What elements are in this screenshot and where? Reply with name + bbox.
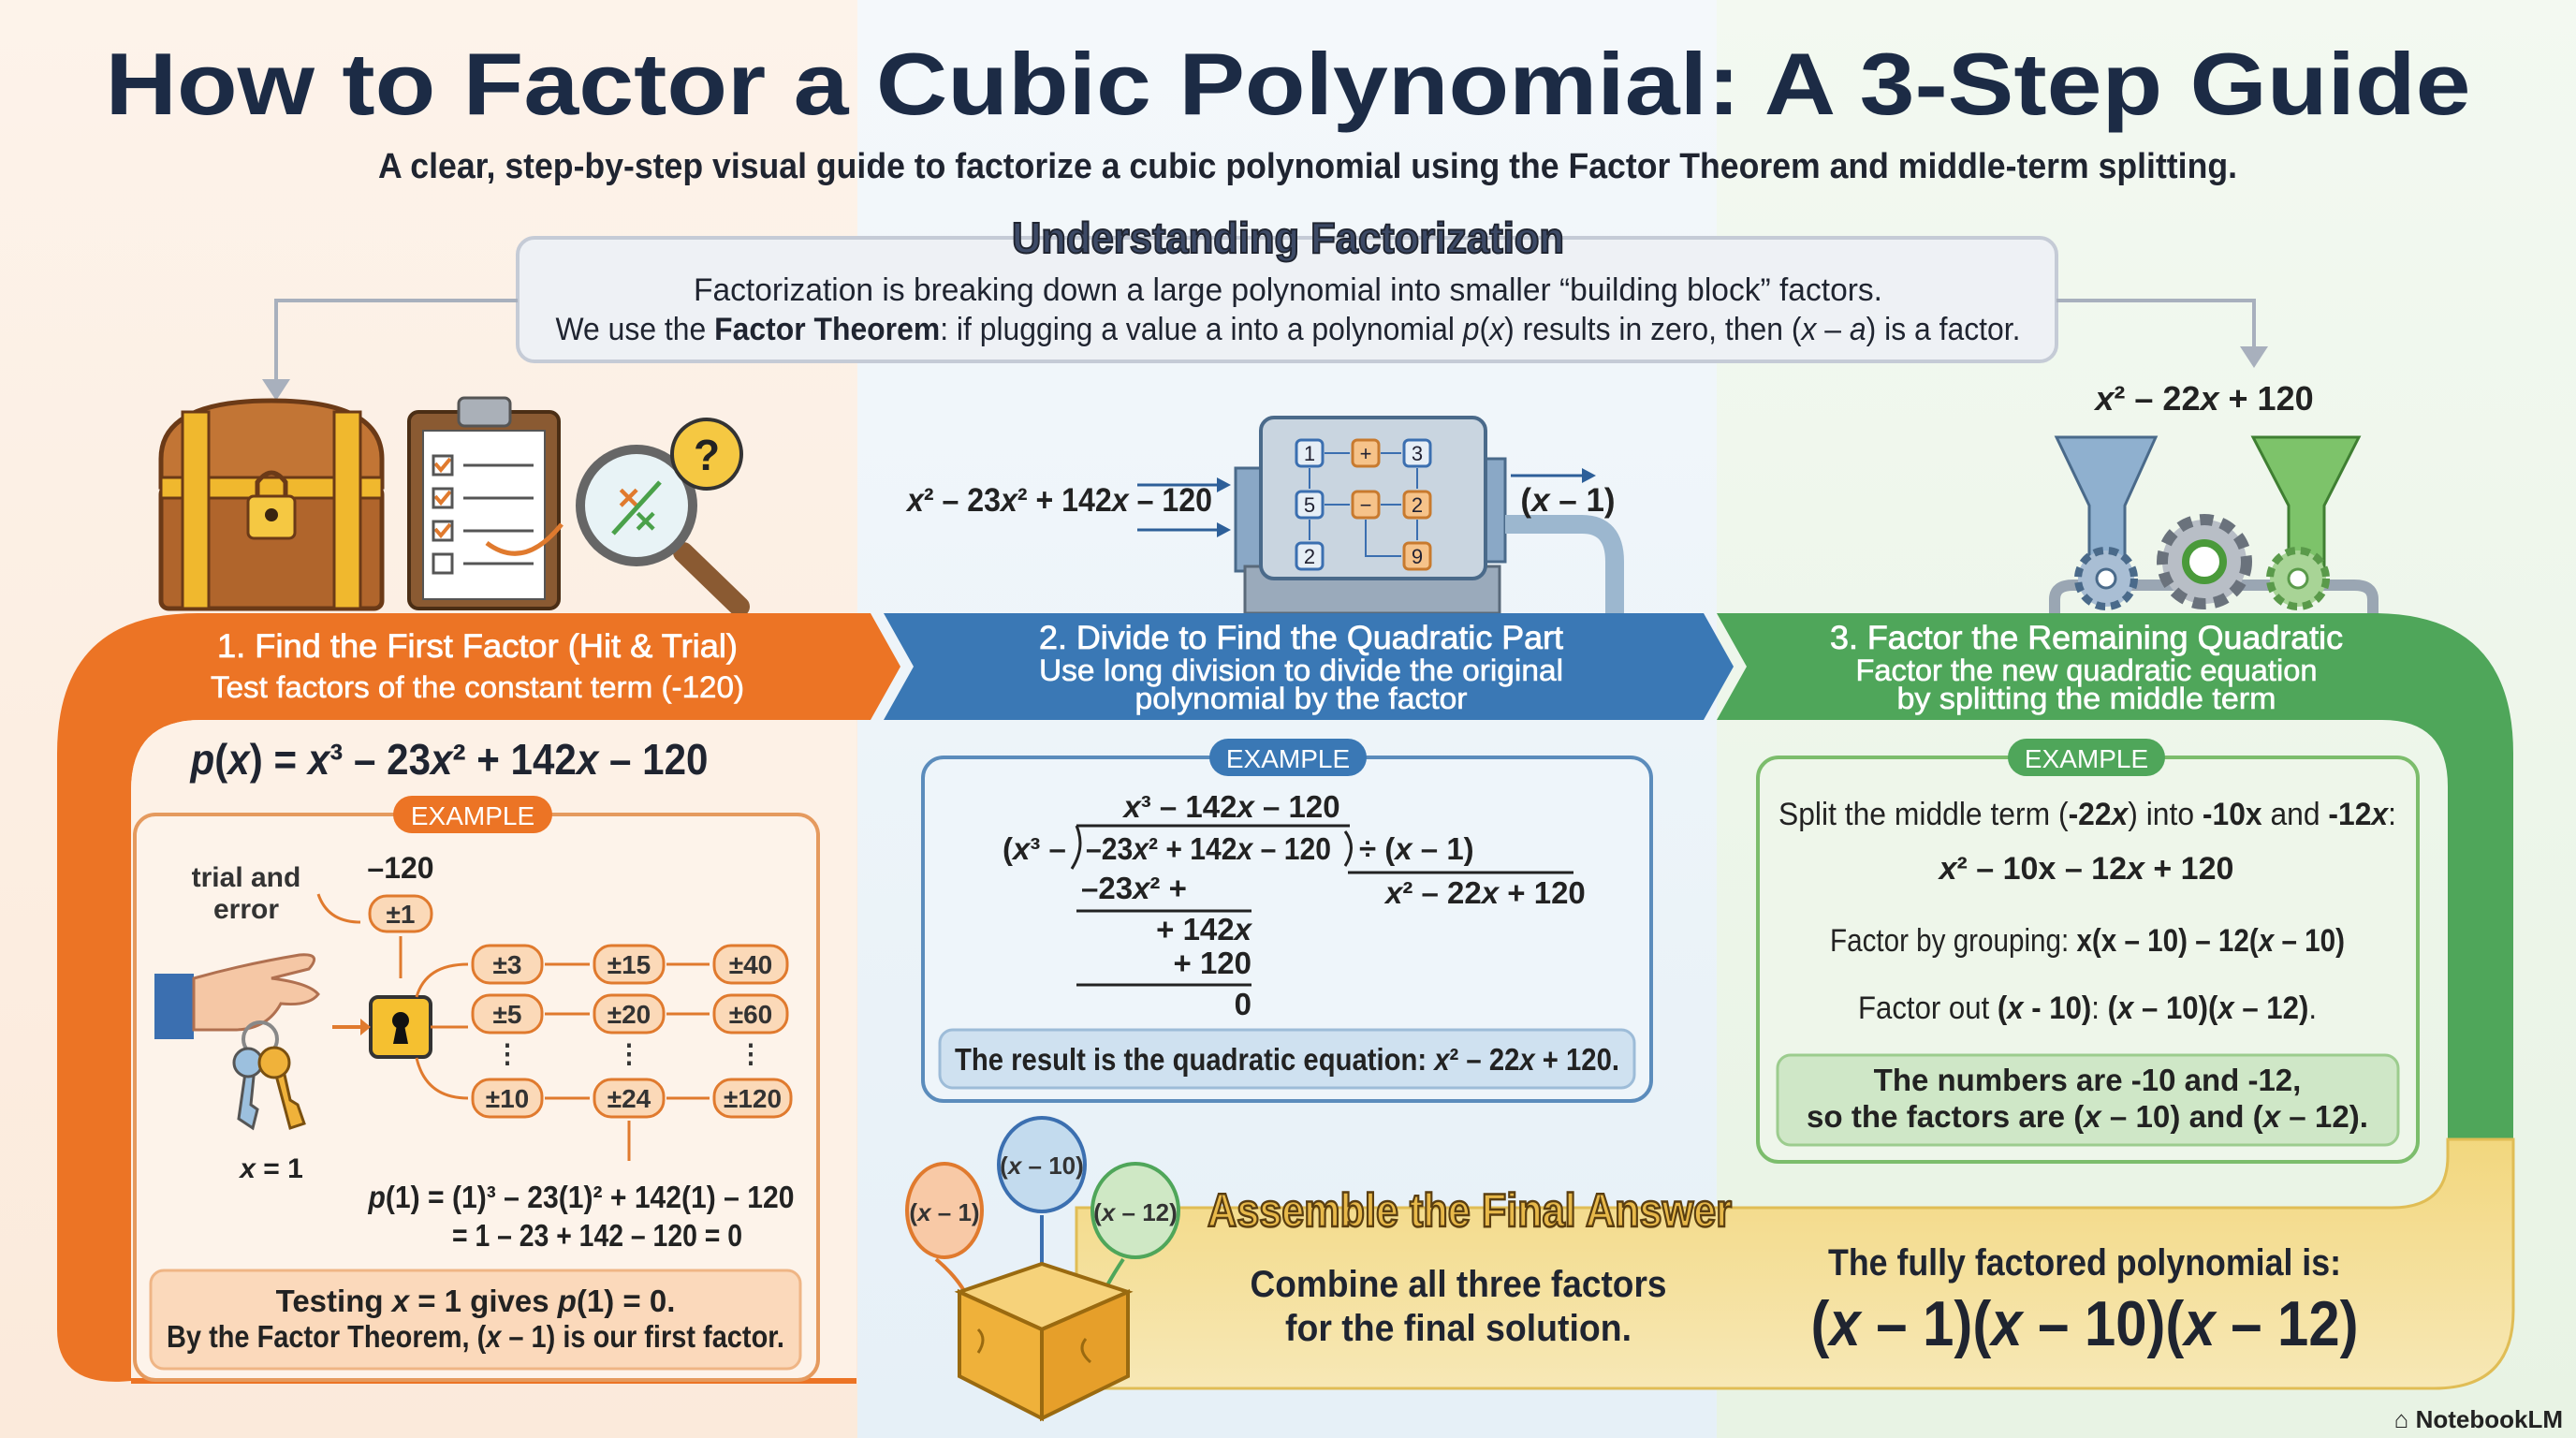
long division: + 120 [1174, 946, 1251, 980]
icon: division machine: 3 [1412, 442, 1423, 465]
text: definition [556, 272, 2020, 347]
step 3 header: 3. Factor the Remaining Quadratic [1830, 620, 2343, 656]
heading: understanding factorization: Understanding Factorization [1012, 213, 1564, 262]
text: combine factors: for the final solution. [1285, 1308, 1632, 1349]
arrow: right [2056, 301, 2268, 368]
text: definition: Factorization is breaking down a large polynomial into smaller “building block” factors. [694, 272, 1882, 308]
text: trial and error: trial and [192, 862, 300, 893]
step 2 header [1039, 620, 1563, 715]
chips grid: ±120 [724, 1084, 782, 1113]
panel: step 3 [1717, 613, 2513, 1162]
arrow: left [262, 301, 518, 401]
chips grid: ±15 [607, 950, 651, 979]
step 1 header [211, 628, 744, 704]
text: step 3 working [1778, 797, 2396, 1026]
formula p(x): p(x) = x³ – 23x² + 142x – 120 [189, 735, 708, 784]
callout: step 1 conclusion: By the Factor Theorem, (x – 1) is our first factor. [167, 1319, 784, 1354]
chips grid: ±3 [493, 950, 521, 979]
text: p(1) evaluation [368, 1180, 794, 1253]
step 1 header: Test factors of the constant term (-120) [211, 670, 744, 704]
icon: lock [371, 936, 431, 1057]
text: step 3 working: Split the middle term (-22x) into -10x and -12x: [1778, 797, 2396, 832]
example box step 1 [135, 796, 818, 1380]
chip ±1: ±1 [387, 900, 415, 929]
long division: x³ – 142x – 120 [1121, 789, 1340, 824]
callout: step 2 result: The result is the quadratic equation: x² – 22x + 120. [955, 1042, 1619, 1077]
icon: magnifier: ? [694, 431, 720, 479]
text: definition: We use the Factor Theorem: if plugging a value a into a polynomial p(x) results in zero, then (x – a) is a factor. [556, 312, 2020, 347]
chips grid: ±40 [729, 950, 772, 979]
icon: division machine: 5 [1304, 493, 1315, 517]
text: quadratic input: x² – 22x + 120 [2093, 379, 2314, 418]
text: final answer [1810, 1242, 2359, 1359]
icon: division machine [1137, 418, 1615, 613]
chips grid: ±24 [607, 1084, 651, 1113]
example pill [1209, 739, 1367, 776]
example box step 2 [923, 739, 1651, 1101]
icon: puzzle box [959, 1264, 1128, 1418]
long division: –23x² + [1081, 871, 1187, 905]
icon: factor bubbles: (x – 10) [1000, 1152, 1084, 1180]
icon: factor bubbles [907, 1118, 1178, 1311]
callout: step 1 conclusion: Testing x = 1 gives p(1) = 0. [276, 1284, 675, 1318]
chips grid: ±5 [493, 1000, 521, 1029]
panel: step 1 [57, 613, 900, 1382]
text: p(1) evaluation: p(1) = (1)³ – 23(1)² + 142(1) – 120 [368, 1180, 794, 1214]
step 1 header: 1. Find the First Factor (Hit & Trial) [217, 628, 738, 665]
logo: NotebookLM: ⌂ NotebookLM [2394, 1405, 2563, 1433]
icon: division machine: − [1360, 493, 1371, 517]
text: step 3 working: Factor by grouping: x(x – 10) – 12(x – 10) [1830, 923, 2345, 959]
callout: step 2 result [940, 1030, 1634, 1088]
text: step 3 working: x² – 10x – 12x + 120 [1938, 851, 2233, 887]
chips grid: ±60 [729, 1000, 772, 1029]
chip ±1 [370, 896, 432, 932]
text: trial and error: error [213, 894, 279, 925]
chips grid: ⋮ [738, 1039, 764, 1068]
icon: division machine: 9 [1412, 545, 1423, 568]
text: trial and error [192, 862, 360, 925]
icon: factor bubbles: (x – 1) [909, 1198, 980, 1226]
long division: x² – 22x + 120 [1383, 875, 1586, 910]
title: How to Factor a Cubic Polynomial: A 3-Step Guide [105, 35, 2471, 133]
chips grid [417, 946, 791, 1161]
icon: clipboard [409, 398, 562, 609]
text: combine factors: Combine all three factors [1251, 1264, 1666, 1305]
text: step 3 working: Factor out (x - 10): (x – 10)(x – 12). [1858, 990, 2317, 1026]
long division: ÷ (x – 1) [1359, 831, 1474, 866]
icon: division machine: 2 [1304, 545, 1315, 568]
step 3 header: Factor the new quadratic equation [1855, 653, 2318, 687]
chips grid: ⋮ [494, 1039, 520, 1068]
text: final answer: (x – 1)(x – 10)(x – 12) [1810, 1288, 2359, 1359]
callout: step 3 conclusion: so the factors are (x – 10) and (x – 12). [1807, 1099, 2368, 1134]
icon: division machine: 1 [1304, 442, 1315, 465]
icon: magnifier: × [618, 477, 639, 519]
heading: assemble the final answer: Assemble the Final Answer [1208, 1184, 1732, 1237]
long division: 0 [1235, 987, 1251, 1021]
text: output factor: (x – 1) [1520, 482, 1616, 519]
chips grid: ±20 [607, 1000, 651, 1029]
callout: step 3 conclusion [1778, 1055, 2398, 1145]
icon: funnels and gears [2055, 437, 2373, 618]
text: final answer: The fully factored polynomial is: [1828, 1242, 2341, 1284]
panel: understanding factorization [518, 213, 2056, 361]
text: p(1) evaluation: = 1 – 23 + 142 – 120 = 0 [452, 1218, 742, 1253]
subtitle: A clear, step-by-step visual guide to factorize a cubic polynomial using the Factor Theorem and middle-term splitting. [378, 147, 2237, 186]
step 2 header: polynomial by the factor [1134, 682, 1468, 715]
text: -120: –120 [367, 851, 434, 885]
example pill: EXAMPLE [411, 801, 534, 830]
example pill: EXAMPLE [1226, 744, 1350, 773]
callout: step 3 conclusion: The numbers are -10 and -12, [1874, 1063, 2301, 1097]
text: combine factors [1251, 1264, 1666, 1349]
icon: magnifier [580, 419, 741, 607]
chips grid: ±10 [486, 1084, 529, 1113]
long division: –23x² + 142x – 120 [1086, 831, 1331, 866]
step 3 header: by splitting the middle term [1896, 682, 2276, 715]
step 2 header: 2. Divide to Find the Quadratic Part [1039, 620, 1563, 656]
text: input polynomial: x² – 23x² + 142x – 120 [905, 482, 1212, 519]
icon: treasure chest [161, 401, 382, 609]
icon: factor bubbles: (x – 12) [1093, 1198, 1178, 1226]
icon: hand with keys [154, 955, 371, 1128]
long division: (x³ – [1003, 831, 1066, 866]
example box step 3 [1758, 739, 2418, 1162]
icon: division machine: 2 [1412, 493, 1423, 517]
long division [1003, 789, 1586, 1021]
example pill: EXAMPLE [2025, 744, 2148, 773]
text: x = 1: x = 1 [238, 1153, 303, 1184]
example pill [2008, 739, 2165, 776]
step 2 header: Use long division to divide the original [1039, 653, 1563, 687]
step 3 header [1830, 620, 2343, 715]
icon: division machine: + [1360, 442, 1371, 465]
chips grid: ⋮ [616, 1039, 642, 1068]
panel: step 2 [884, 613, 1734, 1101]
example pill [393, 796, 552, 833]
panel: assemble final answer [907, 1118, 2513, 1418]
icon: magnifier: × [635, 501, 656, 542]
callout: step 1 conclusion [151, 1270, 800, 1369]
long division: + 142x [1156, 912, 1253, 946]
